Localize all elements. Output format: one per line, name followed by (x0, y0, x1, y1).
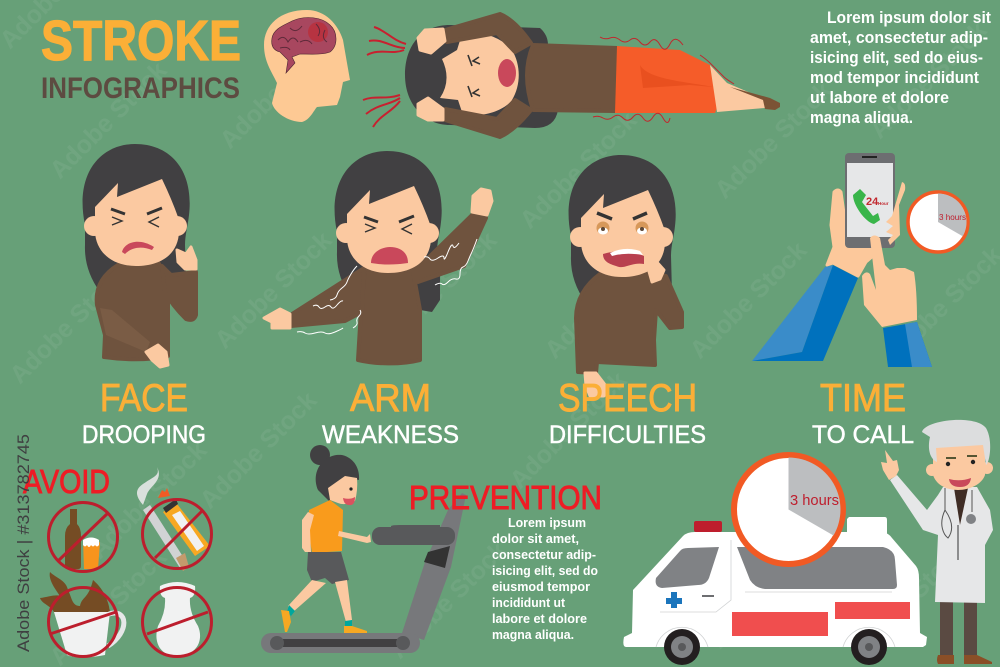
heading: time to call: TIME (820, 377, 906, 420)
text: Adobe Stock (384, 536, 512, 664)
text block: intro lorem ipsum (810, 8, 991, 127)
heading: speech difficulties (549, 377, 706, 449)
text block: intro lorem ipsum: magna aliqua. (810, 108, 913, 127)
text: Adobe Stock (84, 436, 212, 564)
text block: prevention lorem ipsum: labore et dolore (492, 611, 587, 626)
text block: prevention lorem ipsum: magna aliqua. (492, 627, 574, 642)
icon: red pain lines (363, 27, 406, 127)
chart: small clock 3 hours (908, 192, 968, 252)
text block: prevention lorem ipsum: dolor sit amet, (492, 531, 579, 546)
heading: speech difficulties: DIFFICULTIES (549, 421, 706, 449)
illustration: hands with phone (752, 153, 932, 367)
text: Adobe Stock (374, 226, 502, 354)
text: Adobe Stock (704, 526, 832, 654)
text: Adobe Stock (214, 26, 342, 154)
heading: arm weakness: WEAKNESS (322, 421, 459, 449)
text: Adobe Stock (864, 16, 992, 144)
chart: small clock 3 hours: 3 hours (939, 212, 966, 222)
text: Adobe Stock (504, 366, 632, 494)
text: Adobe Stock (844, 536, 972, 664)
heading: time to call: TO CALL (812, 421, 914, 449)
text: Adobe Stock (514, 106, 642, 234)
text block: intro lorem ipsum: isicing elit, sed do eius- (810, 48, 983, 67)
subtitle: infographics: INFOGRAPHICS (41, 72, 240, 105)
chart: big clock 3 hours: 3 hours (790, 492, 839, 509)
illustration: ambulance (623, 517, 927, 665)
heading: arm weakness (322, 377, 459, 449)
heading: arm weakness: ARM (350, 377, 431, 420)
side credit: adobe stock id: Adobe Stock | #313782745 (14, 434, 33, 652)
heading: speech difficulties: SPEECH (558, 377, 697, 420)
text: Adobe Stock (44, 56, 172, 184)
heading: face drooping (82, 377, 206, 449)
heading: face drooping: FACE (100, 377, 188, 420)
text block: prevention lorem ipsum: consectetur adip- (492, 547, 596, 562)
text: Adobe Stock (539, 236, 667, 364)
text: Adobe Stock (4, 261, 132, 389)
text: Adobe Stock (209, 226, 337, 354)
heading: avoid: AVOID (23, 463, 110, 500)
icon: head with brain (264, 10, 350, 122)
text: Adobe Stock (194, 386, 322, 514)
squiggles: tremor lines around body (593, 37, 734, 122)
heading: prevention: PREVENTION (409, 479, 602, 516)
text block: prevention lorem ipsum (492, 515, 598, 642)
title: stroke: STROKE (41, 9, 241, 73)
text block: prevention lorem ipsum: isicing elit, sed do (492, 563, 598, 578)
text block: prevention lorem ipsum: eiusmod tempor (492, 579, 590, 594)
text: Adobe Stock (709, 76, 837, 204)
chart: big clock 3 hours (734, 455, 843, 564)
icon: no alcohol (48, 502, 118, 572)
text block: intro lorem ipsum: amet, consectetur adip- (810, 28, 988, 47)
heading: face drooping: DROOPING (82, 421, 206, 449)
text: Adobe Stock (684, 236, 812, 364)
icon: no salt (142, 582, 212, 656)
text block: intro lorem ipsum: mod tempor incididunt (810, 68, 979, 87)
icon: no smoking (137, 467, 212, 571)
text block: intro lorem ipsum: ut labore et dolore (810, 88, 949, 107)
illustration: doctor pointing (881, 420, 993, 664)
text block: prevention lorem ipsum: incididunt ut (492, 595, 566, 610)
heading: time to call (812, 377, 914, 449)
illustration: woman with speech difficulties (569, 155, 682, 396)
icon: no coffee (40, 572, 124, 657)
squiggles: arm weakness tremor (297, 239, 477, 334)
illustration: hands with phone: 24 (866, 196, 879, 208)
illustration: hands with phone: Hour (878, 201, 889, 206)
illustration: woman running on treadmill (261, 445, 466, 653)
text block: prevention lorem ipsum: Lorem ipsum (508, 515, 586, 530)
illustration: woman with arm weakness (264, 151, 492, 363)
illustration: woman with drooping face (83, 144, 196, 367)
illustration: woman lying down holding head (405, 14, 780, 137)
